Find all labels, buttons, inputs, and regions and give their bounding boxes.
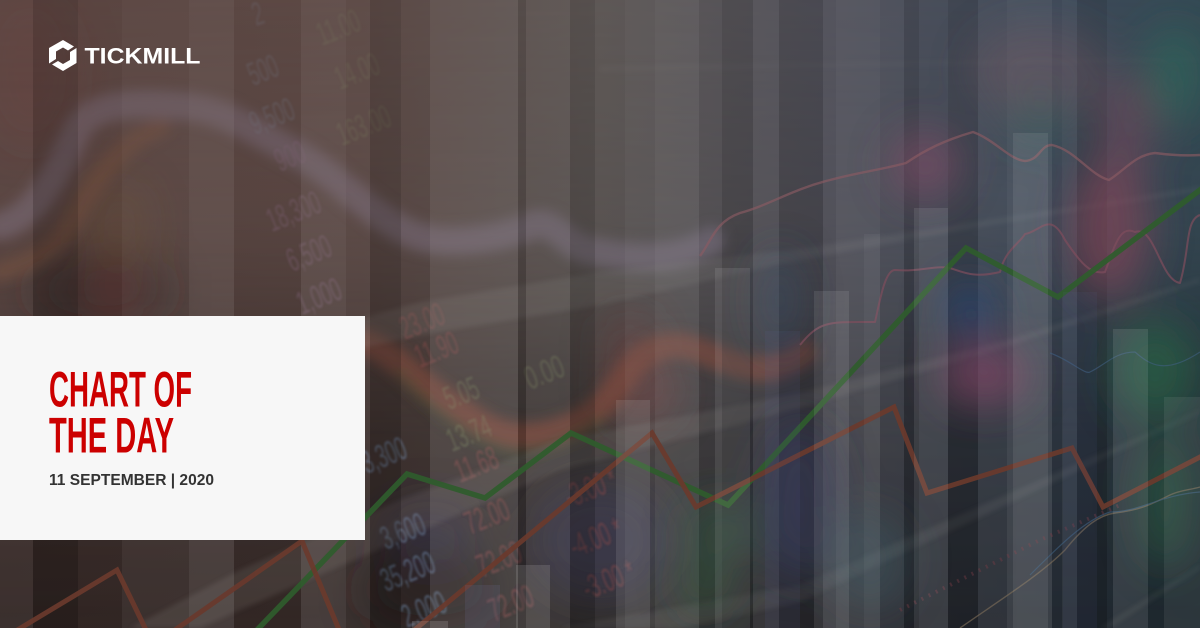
photo haze veil — [0, 0, 1107, 316]
red trend line — [14, 407, 1200, 628]
ghost numbers in the photo: 6,500 — [281, 227, 337, 279]
ghost numbers in the photo: 500 — [242, 47, 284, 93]
ghost numbers in the photo: 11.00 — [311, 2, 366, 53]
ghost numbers in the photo: 72.00 — [459, 490, 515, 542]
ghost numbers in the photo: 5.05 — [438, 369, 485, 417]
ghost numbers in the photo — [242, 0, 640, 628]
green trend line — [255, 187, 1200, 628]
title panel — [0, 316, 365, 540]
ghost numbers in the photo: 163.00 — [331, 98, 396, 153]
title: THE DAY — [49, 408, 174, 464]
ghost numbers in the photo: 1,000 — [291, 270, 347, 322]
title: CHART OF — [49, 362, 192, 418]
ghost numbers in the photo: 72.00 — [483, 577, 539, 628]
ghost numbers in the photo: 3,600 — [375, 505, 431, 557]
icon: hexagon mark — [49, 40, 76, 71]
ghost numbers in the photo: 0.00 — [519, 347, 570, 397]
ghost numbers in the photo: 9,500 — [244, 90, 300, 142]
ghost numbers in the photo: -3.00 * — [577, 552, 640, 607]
ghost numbers in the photo: 23.00 — [394, 295, 450, 347]
warm glows — [0, 0, 680, 628]
thin price lines in the photo — [700, 132, 1200, 628]
ghost numbers in the photo: 3,300 — [356, 429, 412, 481]
ghost numbers in the photo: 13.74 — [441, 407, 497, 459]
ghost numbers in the photo: -4.00 * — [564, 510, 627, 565]
ghost numbers in the photo: 11.68 — [449, 439, 504, 490]
translucent bar chart — [412, 133, 1200, 628]
ghost numbers in the photo: 18,300 — [261, 184, 326, 239]
ghost numbers in the photo: 35,200 — [375, 544, 440, 599]
ghost numbers in the photo: 72.00 — [471, 533, 527, 585]
ghost numbers in the photo: 900 — [269, 133, 311, 179]
ghost numbers in the photo: 14.00 — [329, 45, 385, 97]
ghost numbers in the photo: 11.90 — [409, 324, 464, 375]
date: 11 SEPTEMBER | 2020 — [49, 472, 214, 489]
logo — [49, 40, 200, 71]
colour glows over the haze — [677, 25, 1200, 613]
ghost numbers in the photo: -3.00 * — [559, 460, 622, 515]
wordmark: TICKMILL — [84, 44, 200, 68]
blurred chart ribbons — [0, 104, 805, 452]
